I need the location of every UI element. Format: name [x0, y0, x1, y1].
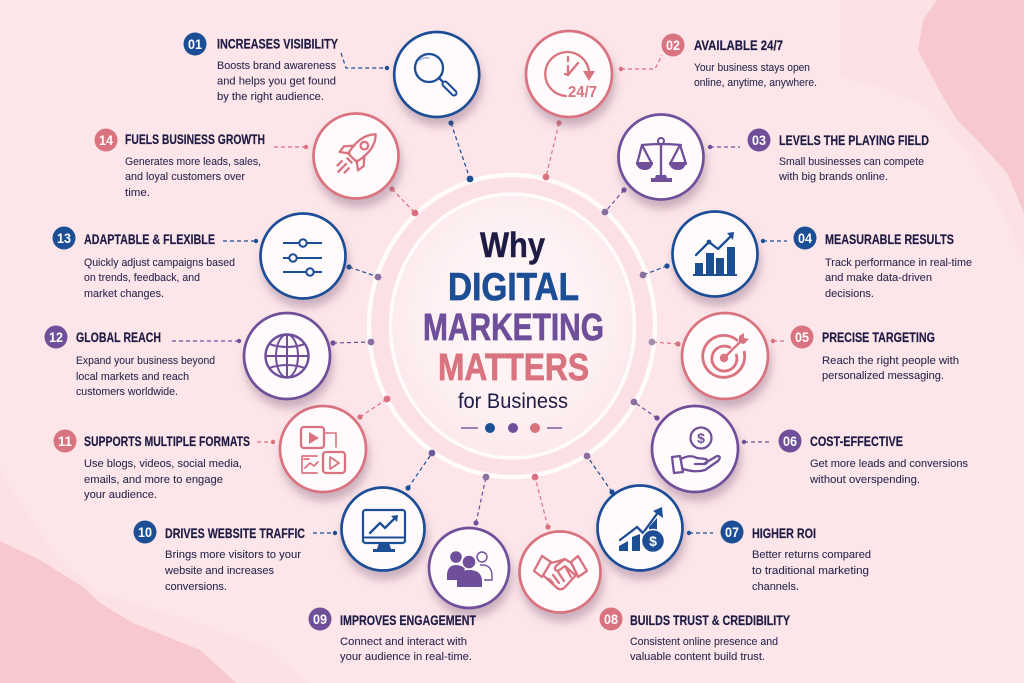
body 08: valuable content build trust. — [630, 651, 765, 663]
title: DIGITAL — [448, 266, 579, 309]
body 14: and loyal customers over — [125, 171, 245, 183]
body 11: emails, and more to engage — [84, 474, 223, 486]
heading 02: AVAILABLE 24/7 — [694, 38, 783, 53]
body 13: market changes. — [84, 288, 164, 300]
heading 09: IMPROVES ENGAGEMENT — [340, 613, 477, 628]
body 08: Consistent online presence and — [630, 636, 778, 648]
body 07: Better returns compared — [752, 549, 871, 561]
heading 01: INCREASES VISIBILITY — [217, 36, 338, 52]
badge 07: 07 — [725, 525, 739, 540]
body 13: on trends, feedback, and — [84, 272, 200, 284]
title divider — [461, 423, 562, 433]
item 09: improves engagement — [308, 474, 509, 663]
body 05: Reach the right people with — [822, 355, 959, 367]
icon: clock 24/7: 24/7 — [568, 84, 597, 101]
icon: clock 24/7 — [545, 52, 597, 101]
body 04: decisions. — [825, 288, 874, 300]
body 03: Small businesses can compete — [779, 156, 924, 168]
badge 02: 02 — [666, 38, 680, 53]
title: Why — [480, 226, 545, 265]
body 06: without overspending. — [809, 474, 920, 486]
icon: scales — [636, 138, 686, 182]
body 03: with big brands online. — [778, 171, 888, 183]
badge 04 — [794, 226, 816, 250]
icon: target — [703, 333, 749, 377]
body 03 — [778, 156, 924, 183]
body 14: time. — [125, 187, 150, 199]
badge 06 — [778, 430, 802, 452]
badge 14 — [94, 128, 118, 152]
body 07: to traditional marketing — [752, 565, 869, 577]
icon: sliders — [283, 239, 322, 276]
icon: hand with coin: $ — [697, 430, 705, 446]
heading 07: HIGHER ROI — [752, 526, 816, 541]
item 05: precise targeting — [649, 313, 959, 399]
heading 04: MEASURABLE RESULTS — [825, 232, 954, 247]
body 01: by the right audience. — [217, 91, 324, 103]
body 01: Boosts brand awareness — [217, 60, 336, 72]
body 08 — [630, 636, 778, 663]
badge 08: 08 — [604, 612, 618, 627]
body 07 — [752, 549, 871, 593]
body 12 — [76, 355, 215, 398]
item 04: measurable results — [640, 212, 972, 300]
body 02 — [694, 62, 817, 89]
item 10: drives website traffic — [134, 450, 435, 593]
body 13 — [84, 257, 235, 300]
badge 05: 05 — [795, 330, 809, 345]
body 06 — [809, 458, 968, 486]
title: for Business — [458, 389, 568, 413]
icon: handshake — [534, 556, 587, 589]
badge 06: 06 — [783, 434, 797, 449]
body 14 — [125, 156, 261, 199]
body 12: Expand your business beyond — [76, 355, 215, 367]
badge 08 — [600, 608, 622, 630]
icon: people — [447, 551, 492, 587]
body 10: Brings more visitors to your — [165, 549, 301, 561]
badge 12 — [44, 326, 68, 348]
badge 09: 09 — [313, 612, 327, 627]
icon: hand with coin — [672, 428, 720, 473]
item 02: available 24/7 — [526, 31, 817, 180]
icon: magnifier — [415, 54, 454, 93]
badge 10: 10 — [138, 525, 152, 540]
heading 10: DRIVES WEBSITE TRAFFIC — [165, 526, 305, 541]
item 11: supports multiple formats — [54, 396, 390, 501]
item 03: levels the playing field — [602, 114, 929, 215]
body 01: and helps you get found — [217, 76, 336, 88]
heading 05: PRECISE TARGETING — [822, 330, 935, 345]
badge 02 — [662, 34, 684, 56]
badge 12: 12 — [49, 330, 63, 345]
icon: monitor — [363, 510, 405, 552]
item 12: global reach — [44, 313, 374, 399]
heading 11: SUPPORTS MULTIPLE FORMATS — [84, 434, 250, 449]
body 10: website and increases — [164, 565, 274, 577]
badge 10 — [134, 520, 156, 544]
body 04 — [825, 257, 972, 300]
badge 07 — [720, 520, 744, 544]
item 06: cost-effective — [631, 399, 968, 492]
body 04: and make data-driven — [825, 272, 932, 284]
body 10 — [164, 549, 301, 593]
badge 03: 03 — [752, 133, 766, 148]
icon: rocket — [328, 124, 386, 182]
body 14: Generates more leads, sales, — [125, 156, 261, 168]
body 11: your audience. — [84, 489, 157, 501]
item 13: adaptable and flexible — [52, 214, 381, 300]
body 12: local markets and reach — [76, 371, 189, 383]
body 12: customers worldwide. — [76, 386, 178, 398]
title: MARKETING — [423, 307, 604, 349]
icon: globe — [266, 334, 308, 378]
body 09: your audience in real-time. — [340, 651, 472, 663]
badge 11 — [54, 430, 76, 452]
badge 11: 11 — [58, 434, 72, 449]
body 07: channels. — [752, 581, 799, 593]
heading 14: FUELS BUSINESS GROWTH — [125, 132, 265, 147]
body 02: online, anytime, anywhere. — [694, 77, 817, 89]
icon: bar chart — [693, 232, 737, 275]
central rings — [369, 175, 655, 477]
item 08: builds trust — [520, 474, 790, 663]
badge 04: 04 — [798, 231, 812, 246]
badge 01: 01 — [188, 37, 202, 52]
heading 03: LEVELS THE PLAYING FIELD — [779, 133, 929, 148]
badge 09 — [308, 608, 332, 630]
title — [423, 226, 604, 413]
body 11: Use blogs, videos, social media, — [84, 458, 242, 470]
body 09 — [340, 636, 472, 663]
body 10: conversions. — [165, 581, 227, 593]
item 14: fuels business growth — [94, 114, 418, 216]
body 05 — [822, 355, 959, 382]
heading 08: BUILDS TRUST & CREDIBILITY — [630, 613, 790, 628]
icon: growth arrow with coin — [619, 507, 664, 552]
body 13: Quickly adjust campaigns based — [84, 257, 235, 269]
badge 14: 14 — [99, 133, 113, 148]
badge 03 — [748, 128, 770, 152]
body 04: Track performance in real-time — [825, 257, 972, 269]
badge 01 — [184, 32, 206, 56]
body 02: Your business stays open — [694, 62, 810, 74]
body 01 — [217, 60, 336, 103]
heading 12: GLOBAL REACH — [76, 330, 161, 345]
badge 13 — [52, 226, 76, 250]
body 06: Get more leads and conversions — [810, 458, 968, 470]
badge 13: 13 — [57, 231, 71, 246]
badge 05 — [790, 326, 814, 348]
icon: growth arrow with coin: $ — [649, 533, 657, 549]
body 05: personalized messaging. — [822, 370, 944, 382]
body 09: Connect and interact with — [340, 636, 467, 648]
icon: media formats — [301, 427, 345, 473]
item 01: increases visibility — [184, 32, 479, 182]
heading 06: COST-EFFECTIVE — [810, 434, 903, 449]
item 07: higher ROI — [584, 453, 871, 593]
heading 13: ADAPTABLE & FLEXIBLE — [84, 232, 215, 247]
title: MATTERS — [438, 347, 589, 389]
body 11 — [84, 458, 242, 501]
